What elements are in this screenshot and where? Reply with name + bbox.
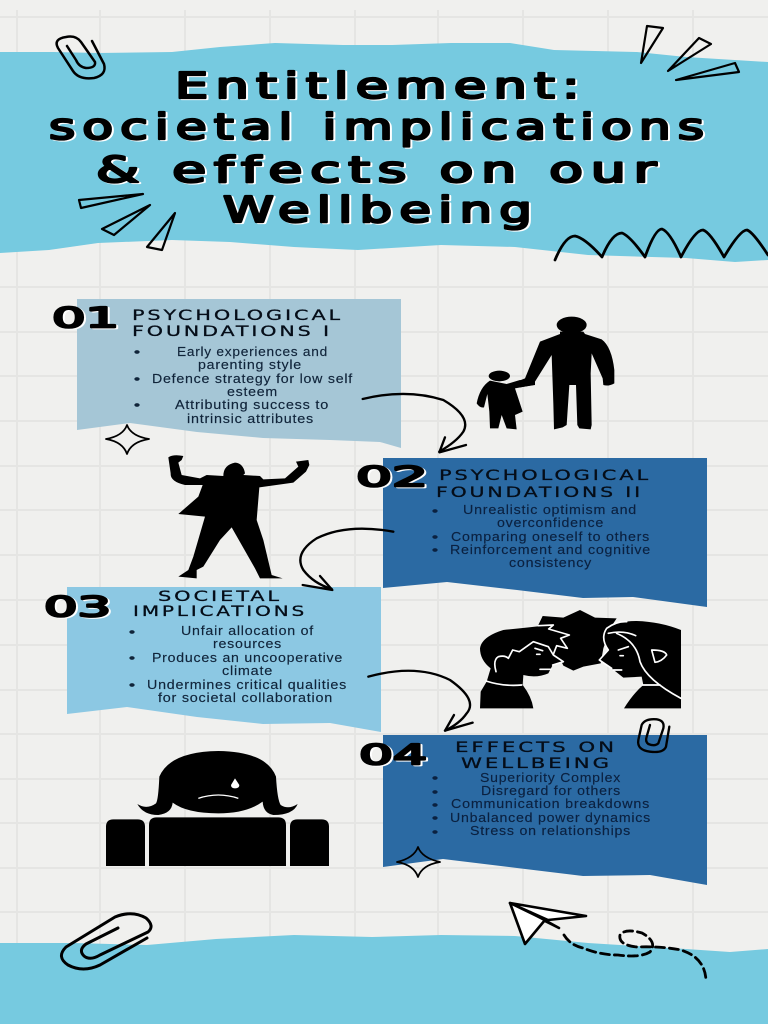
bullet list: for societal collaboration	[158, 690, 333, 705]
bullet list	[432, 502, 651, 570]
bullet list: overconfidence	[497, 515, 604, 530]
bullet list: Early experiences and	[177, 344, 328, 359]
dashed flight path	[564, 931, 706, 982]
icon: paperclip top left	[57, 37, 105, 78]
title: Wellbeing	[223, 190, 539, 231]
top torn paper banner	[0, 43, 768, 262]
heading: SOCIETAL	[158, 589, 282, 605]
bottom torn paper banner	[0, 935, 768, 1024]
heading	[133, 589, 307, 620]
heading: FOUNDATIONS I	[132, 324, 332, 340]
icon: burst strokes lower left of title	[79, 194, 175, 250]
bullet list: Defence strategy for low self	[152, 371, 353, 386]
bullet list: Communication breakdowns	[451, 796, 650, 811]
bullet list: Comparing oneself to others	[451, 529, 650, 544]
bullet list: Stress on relationships	[470, 823, 631, 838]
bullet list: Unfair allocation of	[181, 623, 314, 638]
heading: PSYCHOLOGICAL	[132, 308, 343, 324]
heading	[132, 308, 343, 340]
icon: paperclip bottom left	[61, 914, 151, 969]
bullet list: Undermines critical qualities	[147, 677, 347, 692]
heading	[436, 468, 651, 501]
title	[49, 66, 711, 231]
bullet list: Attributing success to	[175, 397, 329, 412]
bullet list: parenting style	[198, 357, 302, 372]
bullet list: Unrealistic optimism and	[463, 502, 637, 517]
bullet list: resources	[213, 636, 282, 651]
heading	[455, 740, 617, 772]
bullet list	[432, 770, 651, 838]
heading: PSYCHOLOGICAL	[439, 468, 651, 484]
bullet list: Reinforcement and cognitive	[450, 542, 651, 557]
bullet list: esteem	[227, 384, 278, 399]
title: & effects on our	[96, 150, 664, 191]
panel 4: effects on wellbeing	[359, 735, 707, 885]
bullet list	[134, 344, 353, 426]
icon: paper plane	[510, 903, 586, 944]
bullet list: Produces an uncooperative	[152, 650, 343, 665]
icon: sad woman	[106, 751, 329, 866]
bullet list: intrinsic attributes	[187, 411, 314, 426]
icon: man with raised fists	[168, 455, 309, 578]
bullet list: climate	[222, 663, 273, 678]
title: societal implications	[49, 107, 711, 148]
number 02: 02	[356, 460, 428, 493]
number 04: 04	[359, 738, 427, 771]
panel 2: psychological foundations II	[356, 458, 707, 607]
number 01: 01	[52, 301, 119, 334]
heading: FOUNDATIONS II	[436, 485, 643, 501]
heading: IMPLICATIONS	[133, 604, 307, 620]
arrow: panel 3 to panel 4	[368, 671, 473, 731]
bullet list: Superiority Complex	[480, 770, 621, 785]
bullet list: Disregard for others	[481, 783, 621, 798]
panel 3: societal implications	[44, 587, 381, 732]
bullet list	[129, 623, 347, 705]
icon: burst strokes top right	[641, 26, 739, 80]
icon: zigzag line	[555, 229, 768, 260]
arrow: panel 1 to panel 2	[363, 394, 466, 452]
arrow: panel 2 to panel 3	[300, 529, 393, 590]
icon: four-point star	[106, 425, 149, 454]
bullet list: consistency	[509, 555, 592, 570]
title: Entitlement:	[175, 66, 587, 107]
heading: WELLBEING	[461, 756, 612, 772]
icon: adult and child holding hands	[477, 317, 614, 429]
heading: EFFECTS ON	[455, 740, 617, 756]
icon: two people arguing	[480, 610, 681, 708]
panel 1: psychological foundations I	[52, 299, 401, 448]
number 03: 03	[44, 590, 111, 623]
bullet list: Unbalanced power dynamics	[450, 810, 651, 825]
icon: four-point star on panel 4	[397, 847, 440, 877]
icon: paperclip on panel 4	[638, 719, 669, 752]
